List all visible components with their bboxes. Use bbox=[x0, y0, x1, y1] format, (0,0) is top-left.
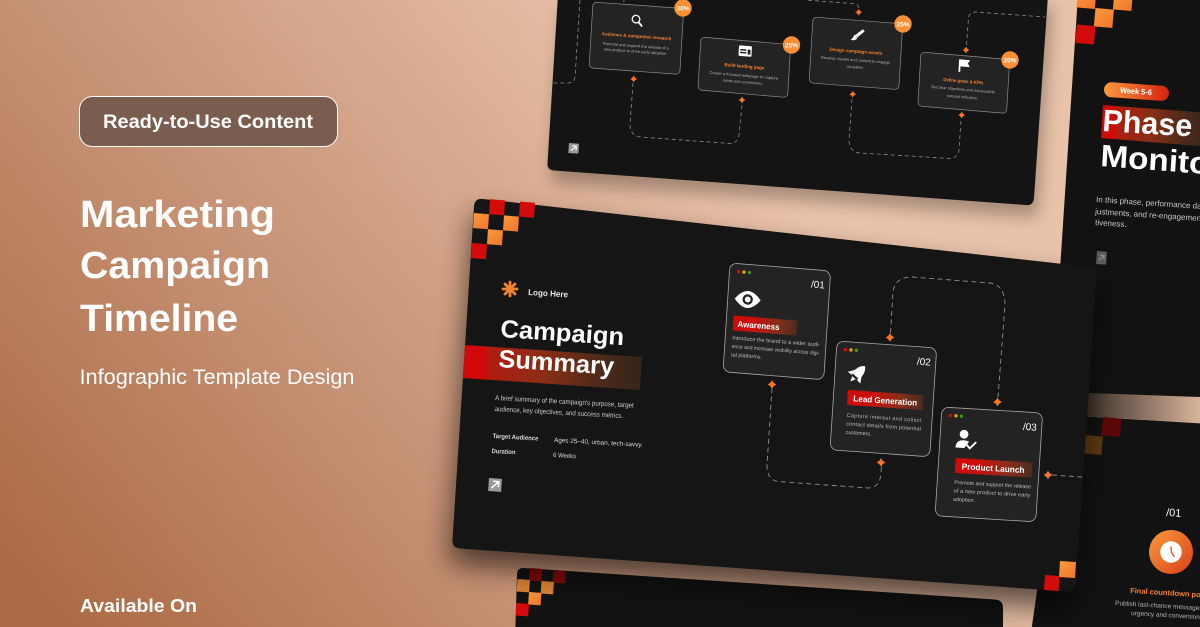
connector stars bbox=[768, 333, 1052, 480]
card: product launch: Promote and support the release bbox=[954, 480, 1031, 490]
phase description bbox=[1094, 195, 1200, 229]
icon: user check bbox=[956, 429, 977, 449]
connector lines bbox=[553, 0, 1045, 158]
available on: Available On bbox=[80, 596, 197, 616]
gap strip between right slides bbox=[1060, 392, 1200, 423]
main slide shadow bbox=[450, 214, 1095, 608]
connector stars bbox=[618, 9, 970, 118]
logo asterisk bbox=[503, 282, 517, 296]
connector lines bbox=[767, 277, 1082, 488]
card: define goals: success indicators. bbox=[947, 93, 978, 100]
badge: 25% second: 25% bbox=[896, 22, 910, 28]
card: audience research: new product to drive early adoption. bbox=[604, 46, 668, 56]
phase title: Phase bbox=[1102, 103, 1193, 143]
title bbox=[498, 315, 625, 381]
card: product launch: adoption. bbox=[953, 497, 975, 504]
description: audience, key objectives, and success metrics. bbox=[494, 406, 623, 420]
card: awareness: Introduce the brand to a wider audi- bbox=[732, 335, 820, 348]
corner pixels bbox=[471, 198, 535, 263]
card: awareness: Awareness bbox=[737, 319, 780, 332]
badge: 30% bbox=[674, 0, 692, 17]
card: landing page: leads and conversions. bbox=[723, 78, 763, 86]
card: landing page bbox=[698, 37, 791, 98]
card: product launch: /03 bbox=[1023, 422, 1038, 434]
target audience row: Ages 25–40, urban, tech-savvy. bbox=[554, 437, 643, 449]
corner pixels: bottom right bbox=[1044, 561, 1076, 591]
card: lead generation: Capture interest and collect bbox=[847, 413, 922, 424]
card: design assets: Develop visuals and content to engage bbox=[821, 55, 890, 65]
card: lead generation: /02 bbox=[917, 357, 932, 369]
card: audience research: Promote and support the release of a bbox=[603, 41, 670, 51]
description bbox=[494, 395, 634, 420]
badge: Ready-to-Use Content bbox=[80, 96, 338, 146]
card: landing page: Build landing page bbox=[724, 62, 765, 71]
icon: arrow bbox=[1096, 251, 1107, 265]
phase title bbox=[1100, 103, 1200, 186]
badge: Ready-to-Use Content: Ready-to-Use Content bbox=[103, 112, 314, 133]
badge: 25%: 25% bbox=[785, 42, 798, 50]
card: design assets: your audience. bbox=[846, 64, 864, 70]
number: /01 bbox=[1166, 507, 1181, 520]
title: Summary bbox=[498, 345, 615, 381]
card: product launch bbox=[935, 407, 1043, 522]
card: define goals bbox=[918, 52, 1010, 113]
title: Campaign bbox=[500, 315, 625, 351]
week badge: Week 5-6 bbox=[1120, 86, 1153, 97]
card: awareness: ence and increase visibility across digi- bbox=[731, 344, 820, 357]
card: product launch: of a new product to drive early bbox=[953, 488, 1031, 499]
main heading bbox=[80, 194, 275, 340]
card: design assets: Design campaign assets bbox=[829, 47, 883, 56]
slide: final countdown (lower right, cropped) bbox=[1030, 415, 1200, 627]
slide: campaign summary (main) bbox=[452, 198, 1097, 592]
icon: corner arrow bbox=[488, 478, 502, 492]
logo text: Logo Here bbox=[528, 287, 569, 299]
corner pixels bbox=[516, 568, 566, 616]
icon: eye bbox=[734, 290, 761, 309]
phase title bar bbox=[1101, 105, 1200, 147]
card: awareness: /01 bbox=[811, 279, 826, 292]
description: A brief summary of the campaign's purpose, target bbox=[495, 395, 634, 410]
badge: 20% bbox=[1001, 51, 1019, 69]
slide: lower centre (cropped) bbox=[515, 568, 1003, 627]
badge: 30%: 30% bbox=[676, 6, 690, 12]
title highlight bar bbox=[463, 345, 642, 390]
card: audience research: Audience & competitor research bbox=[601, 31, 672, 41]
corner pixels bbox=[1075, 0, 1133, 45]
target audience row: Target Audience bbox=[492, 433, 539, 443]
duration row: 6 Weeks bbox=[553, 452, 577, 460]
badge: 25% second bbox=[894, 15, 912, 33]
card: landing page: Create a focused webpage to capture bbox=[709, 70, 778, 81]
card: lead generation: customers. bbox=[845, 430, 872, 438]
card: product launch: Product Launch bbox=[961, 461, 1025, 475]
countdown description bbox=[1115, 600, 1200, 621]
card: define goals: Set clear objectives and measurable bbox=[931, 84, 995, 94]
main heading: Campaign bbox=[80, 245, 270, 287]
target audience row bbox=[492, 433, 643, 449]
main heading: Timeline bbox=[80, 298, 238, 340]
phase description: tiveness. bbox=[1095, 218, 1127, 229]
subtitle: Infographic Template Design bbox=[80, 366, 354, 389]
duration row bbox=[491, 448, 577, 460]
card: awareness bbox=[723, 263, 831, 380]
card: lead generation: contact details from potential bbox=[846, 421, 921, 433]
card: audience research bbox=[589, 2, 684, 74]
icon: corner arrow bbox=[568, 143, 579, 154]
card: lead generation: Lead Generation bbox=[853, 393, 917, 408]
card: lead generation bbox=[830, 341, 937, 457]
card: design assets bbox=[809, 17, 903, 90]
icon: rocket bbox=[844, 360, 871, 387]
dim pixels bbox=[1083, 417, 1121, 455]
badge: 25% bbox=[783, 36, 800, 54]
card: define goals: Define goals & KPIs bbox=[943, 77, 984, 85]
icon: clock bbox=[1149, 530, 1193, 574]
badge: 20%: 20% bbox=[1003, 58, 1017, 64]
slide: phase monitoring (right, cropped) bbox=[1052, 0, 1200, 398]
main heading: Marketing bbox=[80, 194, 275, 236]
duration row: Duration bbox=[491, 448, 516, 456]
card: awareness: tal platforms. bbox=[731, 352, 762, 361]
week badge bbox=[1104, 82, 1169, 101]
slide: budget timeline (top, partially cropped) bbox=[547, 0, 1052, 217]
